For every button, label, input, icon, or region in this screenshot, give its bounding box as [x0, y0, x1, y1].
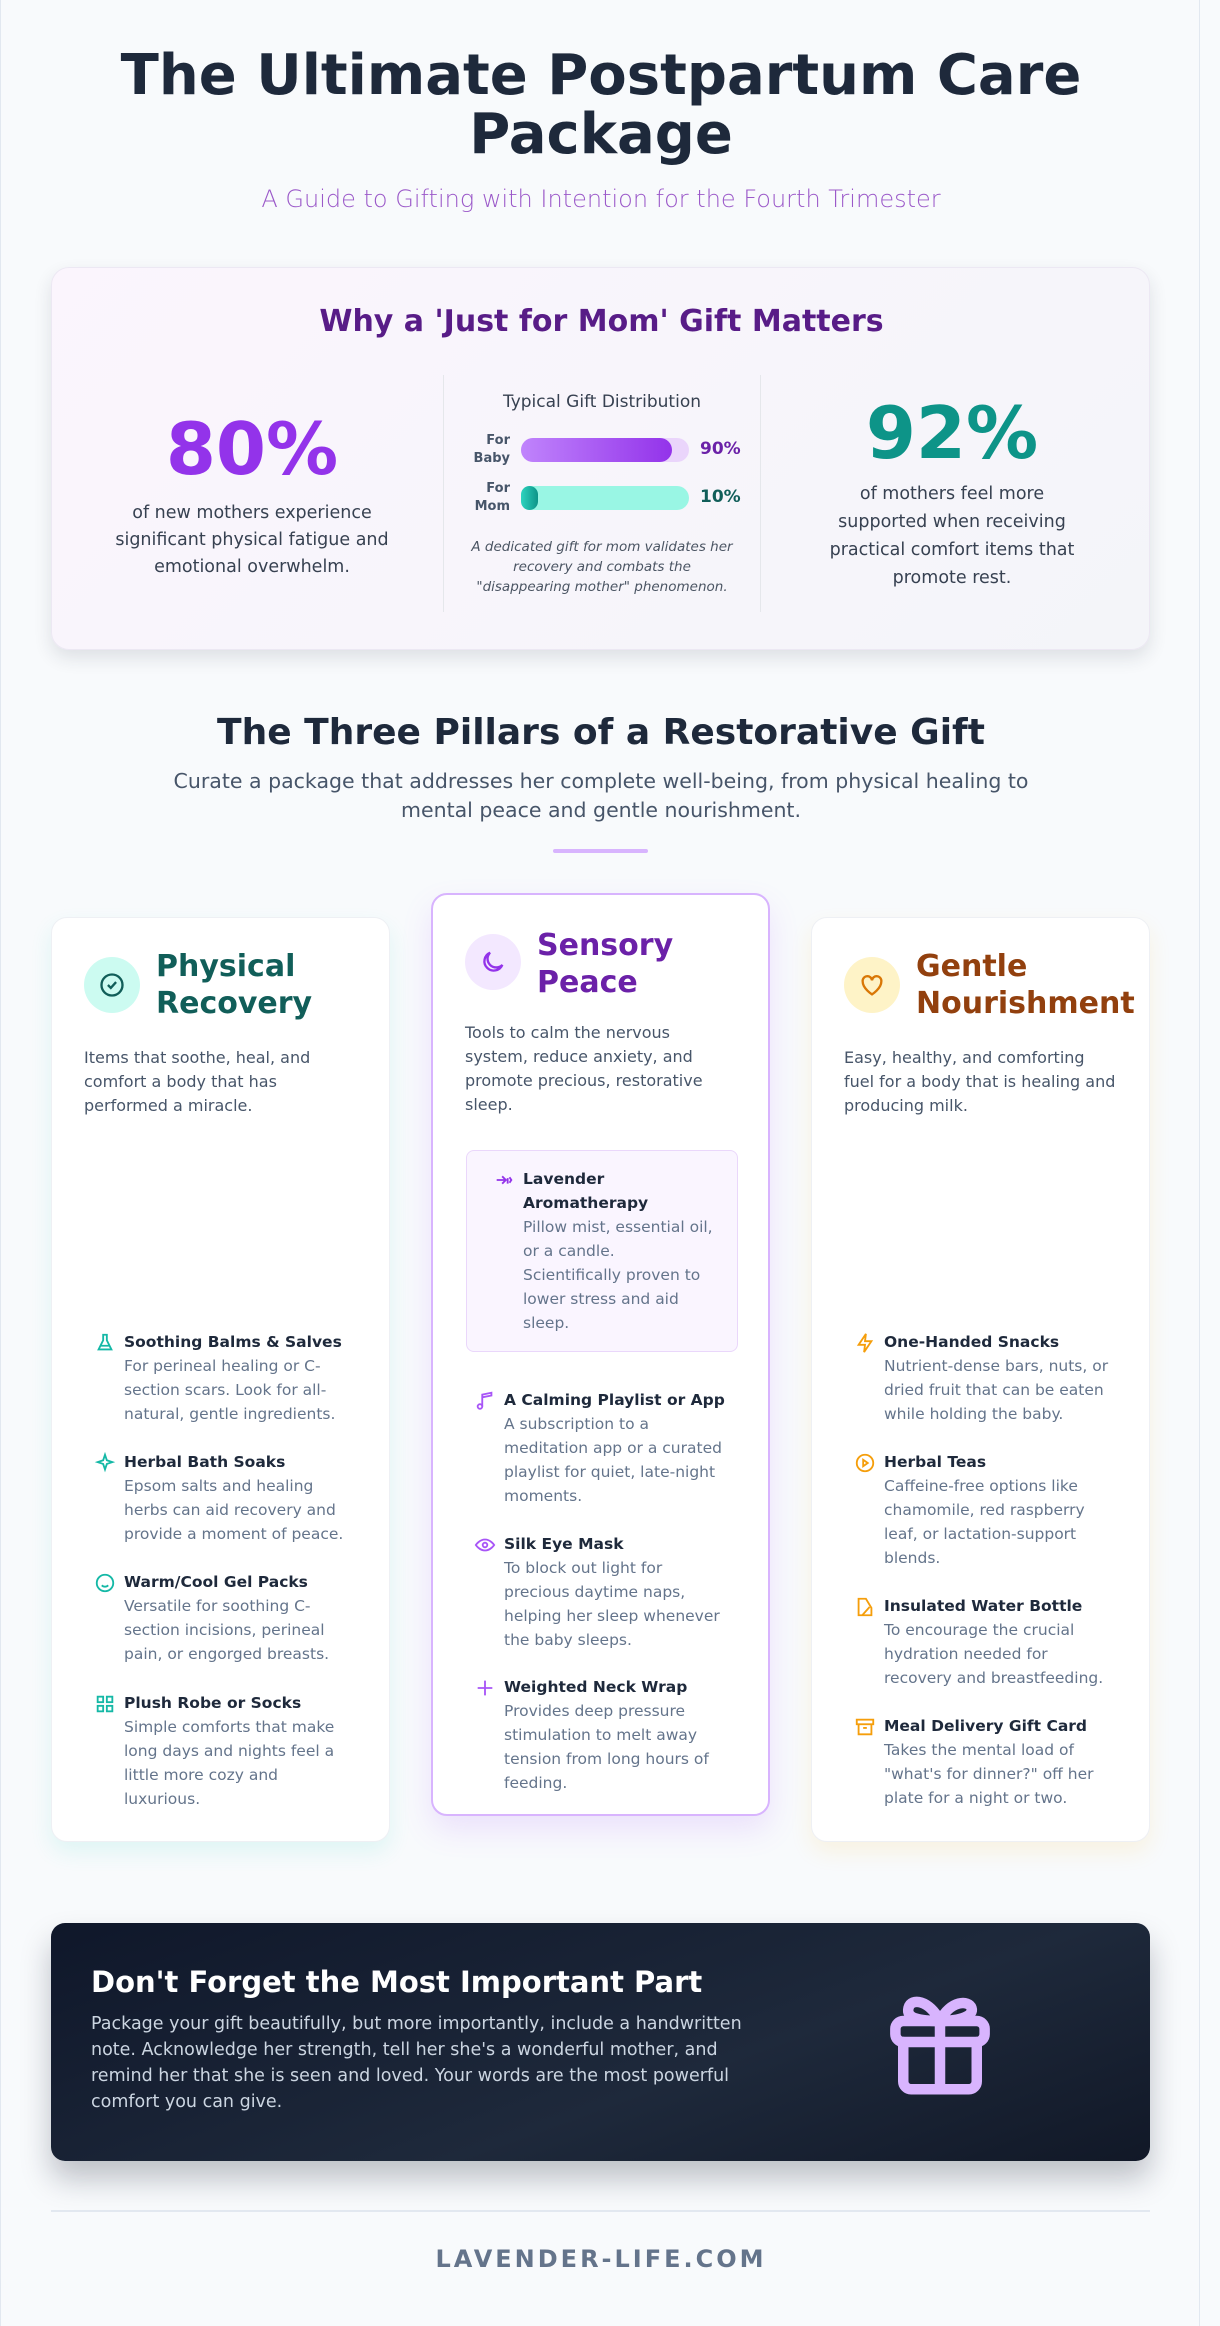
chart caption: A dedicated gift for mom validates her [471, 539, 733, 555]
icon: gift [890, 1996, 990, 2094]
item: water bottle: To encourage the crucial hydration needed for recovery and breastfeeding. [884, 1621, 1103, 1687]
item: gel packs: Versatile for soothing C-section incisions, perineal pain, or engorged breasts. [124, 1597, 329, 1663]
section description: mental peace and gentle nourishment. [401, 798, 801, 822]
item: playlist: A subscription to a meditation app or a curated playlist for quiet, late-night moments. [504, 1415, 722, 1505]
section description: Curate a package that addresses her complete well-being, from physical healing to [174, 769, 1028, 793]
item: robe: Plush Robe or Socks [124, 1694, 301, 1712]
chart: typical gift distribution [470, 392, 741, 595]
item: water bottle: Insulated Water Bottle [884, 1597, 1082, 1615]
card description: Items that soothe, heal, and comfort a body that has performed a miracle. [84, 1048, 310, 1115]
highlight: lavender aromatherapy [466, 1150, 738, 1352]
panel: physical recovery [51, 917, 390, 1842]
chart caption: recovery and combats the [513, 559, 691, 575]
card title: Gentle [916, 949, 1027, 984]
card title: Peace [537, 965, 638, 1000]
stat: 80%: of new mothers experience [132, 503, 372, 523]
bar: for baby: 90% [700, 439, 741, 459]
title: Package [469, 102, 733, 167]
title: The Ultimate Postpartum Care [121, 43, 1081, 108]
chart caption [470, 539, 734, 595]
card title: Physical [156, 949, 295, 984]
bar: for mom [475, 481, 741, 514]
item: neck wrap [478, 1678, 710, 1792]
section heading: The Three Pillars of a Restorative Gift [217, 712, 985, 753]
chart caption: "disappearing mother" phenomenon. [476, 579, 728, 595]
callout heading: Don't Forget the Most Important Part [91, 1965, 702, 1999]
icon: check circle [84, 957, 140, 1013]
item: playlist: A Calming Playlist or App [504, 1391, 725, 1409]
bar: for baby [474, 433, 741, 466]
bar: for baby: For [486, 433, 510, 448]
item: eye mask [474, 1535, 720, 1649]
callout text: Package your gift beautifully, but more importantly, include a handwritten note. Acknowledge her strength, tell her she's a wonderful mother, and remind her that she is seen and loved. Your words are the most powerful comfort you can give. [91, 2014, 742, 2112]
item: bath soaks: Epsom salts and healing herbs can aid recovery and provide a moment of peace. [124, 1477, 343, 1543]
bar: for mom: Mom [475, 499, 510, 514]
stat: 92%: 92% [866, 391, 1038, 475]
item: eye mask: Silk Eye Mask [504, 1535, 624, 1553]
item: snacks: Nutrient-dense bars, nuts, or dried fruit that can be eaten while holding the baby. [884, 1357, 1108, 1423]
item: teas: Herbal Teas [884, 1453, 986, 1471]
card description: fuel for a body that is healing and producing milk. [844, 1072, 1115, 1115]
card description: Easy, healthy, and comforting [844, 1048, 1085, 1067]
card title: Nourishment [916, 986, 1135, 1021]
item: water bottle [858, 1597, 1103, 1687]
icon: heart [844, 957, 900, 1013]
item: robe: Simple comforts that make long days and nights feel a little more cozy and luxurious. [124, 1718, 334, 1808]
item: eye mask: To block out light for precious daytime naps, helping her sleep whenever the baby sleeps. [504, 1559, 720, 1649]
item: robe [96, 1694, 334, 1808]
subtitle: A Guide to Gifting with Intention for the Fourth Trimester [261, 185, 941, 213]
icon: moon [465, 934, 521, 990]
panel: gentle nourishment [811, 917, 1150, 1842]
item: snacks [856, 1333, 1108, 1423]
item: balms: Soothing Balms & Salves [124, 1333, 342, 1351]
stat: 80%: emotional overwhelm. [154, 557, 350, 577]
item: neck wrap: Weighted Neck Wrap [504, 1678, 687, 1696]
chart: typical gift distribution: Typical Gift Distribution [503, 392, 701, 412]
card title [916, 949, 1135, 1021]
stat: 92%: practical comfort items that [830, 540, 1074, 560]
highlight: lavender aromatherapy: Scientifically proven to lower stress and aid sleep. [523, 1266, 700, 1332]
card description: Tools to calm the nervous system, reduce anxiety, and promote precious, restorative sleep. [465, 1023, 703, 1114]
panel: why it matters [51, 267, 1150, 650]
bar: for baby: Baby [474, 451, 510, 466]
bar: for mom: For [486, 481, 510, 496]
stat: 92%: promote rest. [893, 568, 1011, 588]
item: playlist [476, 1391, 725, 1505]
callout: important part [51, 1923, 1150, 2161]
card title: Recovery [156, 986, 312, 1021]
item: neck wrap: Provides deep pressure stimulation to melt away tension from long hours of feeding. [504, 1702, 709, 1792]
panel heading: Why a 'Just for Mom' Gift Matters [319, 304, 884, 339]
item: teas [856, 1453, 1085, 1567]
highlight: lavender aromatherapy: Pillow mist, essential oil, or a candle. [523, 1218, 713, 1260]
item: gel packs [96, 1573, 329, 1663]
item: meal delivery: Meal Delivery Gift Card [884, 1717, 1087, 1735]
footer: brand: LAVENDER-LIFE.COM [435, 2245, 767, 2273]
panel: sensory peace [431, 893, 770, 1816]
highlight: lavender aromatherapy: Lavender Aromatherapy [523, 1170, 648, 1212]
item: meal delivery [856, 1717, 1094, 1807]
item: meal delivery: Takes the mental load of "what's for dinner?" off her plate for a night or two. [884, 1741, 1094, 1807]
stat: 80% [115, 407, 389, 577]
card title [156, 949, 312, 1021]
item: gel packs: Warm/Cool Gel Packs [124, 1573, 308, 1591]
item: bath soaks [94, 1452, 343, 1543]
card title: Sensory [537, 928, 673, 963]
item: balms [97, 1333, 342, 1423]
title [120, 43, 1081, 167]
card title [537, 928, 673, 1000]
stat: 92% [830, 391, 1074, 588]
stat: 80%: significant physical fatigue and [115, 530, 389, 550]
item: snacks: One-Handed Snacks [884, 1333, 1059, 1351]
section description [174, 769, 1028, 822]
stat: 92%: of mothers feel more [860, 484, 1044, 504]
stat: 80%: 80% [166, 407, 338, 491]
item: bath soaks: Herbal Bath Soaks [124, 1453, 285, 1471]
item: teas: Caffeine-free options like chamomile, red raspberry leaf, or lactation-support blends. [884, 1477, 1085, 1567]
bar: for mom: 10% [700, 487, 741, 507]
stat: 92%: supported when receiving [838, 512, 1066, 532]
card description [844, 1048, 1115, 1115]
item: balms: For perineal healing or C-section scars. Look for all-natural, gentle ingredients. [124, 1357, 335, 1423]
